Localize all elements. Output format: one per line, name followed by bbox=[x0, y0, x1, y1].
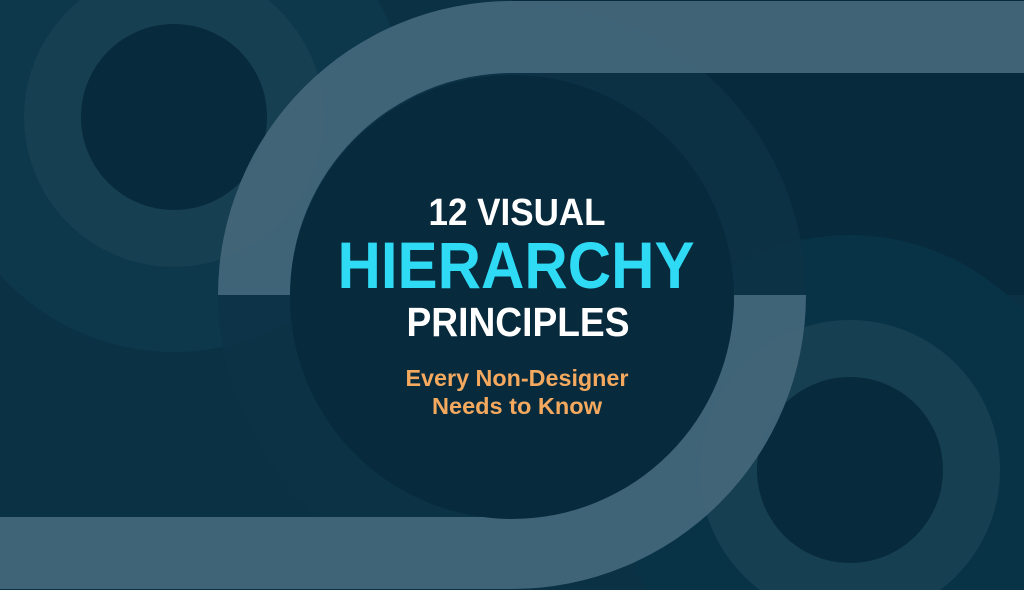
subtitle bbox=[406, 365, 629, 419]
subtitle: Every Non-Designer bbox=[406, 365, 629, 391]
title text: PRINCIPLES bbox=[406, 299, 630, 345]
subtitle: Needs to Know bbox=[432, 393, 602, 419]
title text: HIERARCHY bbox=[338, 228, 694, 302]
central medium ring bbox=[218, 1, 806, 589]
title text bbox=[338, 192, 694, 345]
central dark circle bbox=[290, 75, 734, 519]
top-left decorative rings bbox=[0, 0, 409, 352]
bottom-right decorative rings bbox=[615, 235, 1024, 590]
title text: 12 VISUAL bbox=[428, 192, 606, 234]
